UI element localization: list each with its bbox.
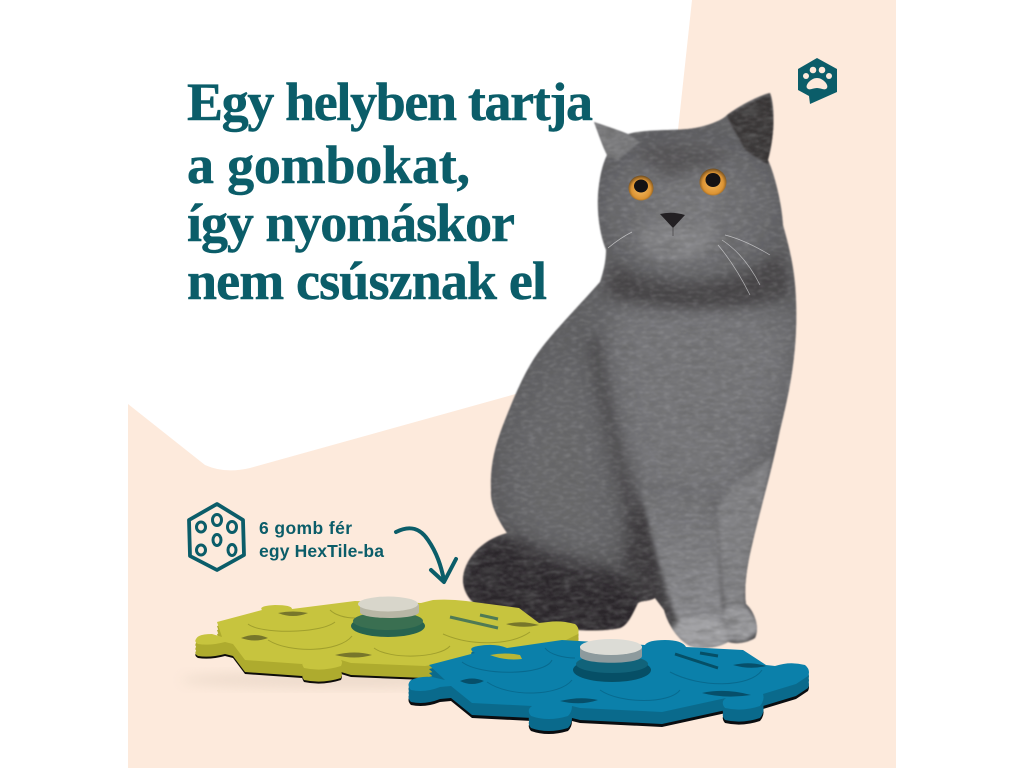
blue tile base — [408, 655, 809, 734]
cat left eye — [628, 176, 654, 200]
cat muzzle — [639, 223, 715, 262]
fur texture light — [464, 94, 796, 642]
yellow tile top — [195, 600, 579, 670]
arrow — [396, 528, 456, 582]
title — [187, 72, 593, 311]
green button — [351, 596, 425, 637]
title: nem csúsznak el — [187, 251, 547, 311]
white headline panel — [128, 0, 692, 470]
cat chest — [607, 296, 792, 520]
cat front leg right — [715, 457, 772, 615]
fur texture dark — [464, 95, 774, 646]
cat mouth and whiskers — [608, 228, 770, 295]
cat tail — [462, 534, 647, 631]
product: yellow tile — [180, 596, 579, 688]
cat ear right — [727, 93, 775, 165]
blue tile logo — [675, 653, 718, 668]
cat nose — [660, 213, 685, 228]
page background panel — [128, 0, 896, 768]
yellow tile base — [195, 614, 579, 684]
blue tile cutouts — [490, 654, 522, 660]
cat body crease — [586, 337, 639, 520]
title: a gombokat, — [187, 135, 470, 195]
cat ear left — [594, 122, 640, 160]
title: így nyomáskor — [187, 193, 515, 253]
cat forehead shading — [635, 143, 730, 180]
blue tile side — [408, 644, 809, 731]
yellow tile logo — [450, 615, 498, 628]
product: blue tile — [408, 639, 809, 734]
cat front leg left — [640, 491, 725, 626]
title: Egy helyben tartja — [187, 72, 593, 132]
tile shadow — [180, 672, 520, 688]
callout text: 6 gomb fér — [259, 518, 352, 538]
callout text — [259, 518, 384, 561]
blue button — [573, 639, 651, 682]
cat head — [614, 129, 768, 272]
icon: brand logo paw hexagon — [798, 58, 837, 104]
cat neck shadow — [604, 250, 790, 309]
yellow tile side — [195, 604, 579, 682]
cat right eye — [700, 168, 726, 196]
blue tile top — [408, 640, 809, 719]
cat paws — [668, 617, 730, 650]
icon: hexagon with six buttons — [189, 504, 244, 570]
blue tile grooves — [462, 648, 762, 700]
yellow tile cutouts — [241, 612, 539, 658]
cat front shadow between legs — [627, 500, 664, 610]
callout text: egy HexTile-ba — [259, 541, 384, 561]
cat haunch — [501, 350, 625, 561]
yellow tile grooves — [248, 610, 530, 656]
illustration: grey cat — [462, 92, 798, 648]
